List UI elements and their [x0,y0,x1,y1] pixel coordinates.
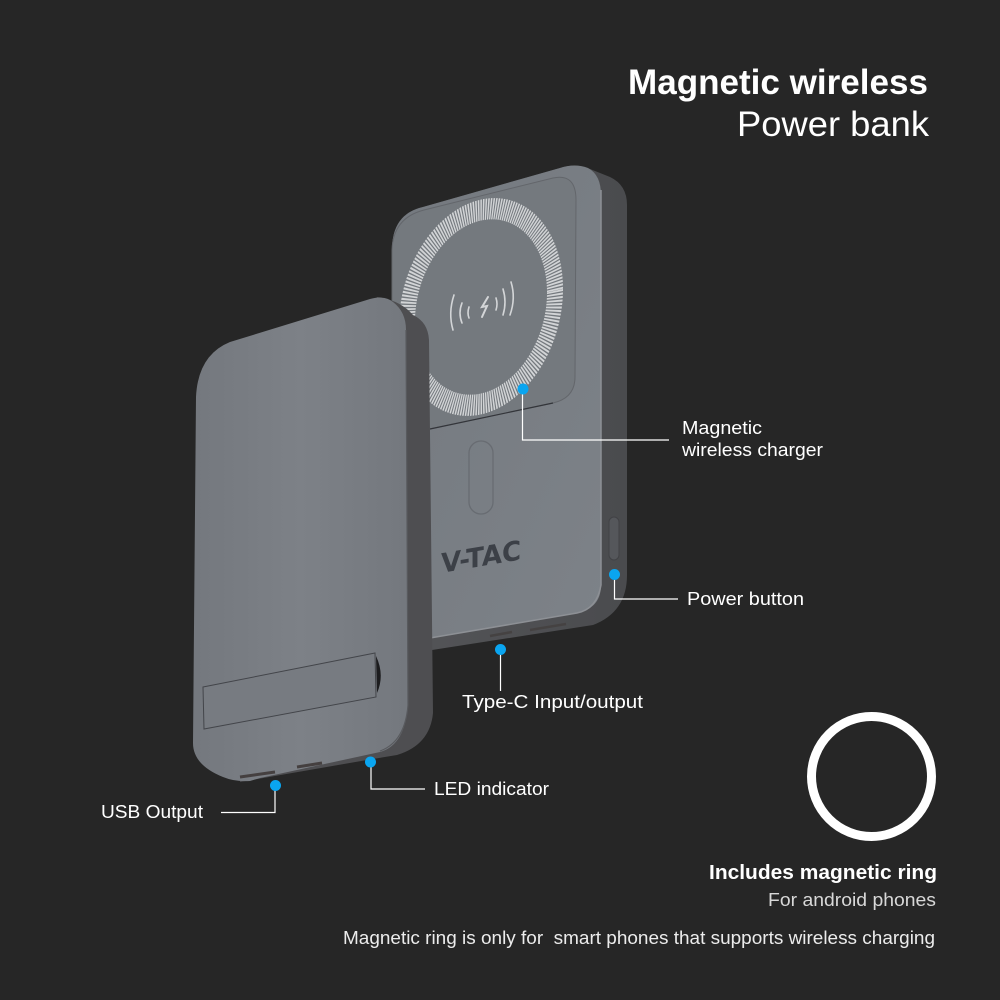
front device side [240,297,433,782]
title [628,63,930,144]
back device face [392,166,601,640]
USB port [240,763,322,777]
ring note: For android phones [768,890,936,910]
ring note: Includes magnetic ring [709,862,937,884]
ring note: Magnetic ring is only for smart phones that supports wireless charging [343,928,935,948]
kickstand [203,653,376,729]
oval button mark [469,441,493,514]
callout: magnetic wireless charger: Magnetic [682,418,762,438]
bottom edge highlight [430,190,601,638]
title: Power bank [737,105,930,144]
wireless charging pad [392,177,576,431]
callout: USB output: USB Output [101,802,203,822]
ring note [343,862,937,948]
callout: type-c [462,644,643,712]
front device face [193,298,408,781]
callout: LED indicator: LED indicator [434,779,549,799]
side power button [609,517,619,560]
title: Magnetic wireless [628,63,928,102]
front power bank [193,297,433,782]
callout: magnetic wireless charger: wireless charger [681,440,823,460]
callout: LED indicator [365,756,549,799]
face edge line [380,330,408,751]
icon: magnetic ring [812,716,932,836]
V-TAC logo: V-TAC [441,536,521,580]
pad lower edge [430,403,553,429]
back device body [392,166,627,650]
callout: power button [609,569,804,609]
kickstand notch [376,656,381,693]
wireless charge icon [451,282,513,330]
back power bank [392,166,627,650]
callout: power button: Power button [687,589,804,609]
bolt [482,297,488,317]
callout: type-c: Type-C Input/output [462,692,643,712]
callout: USB output [101,780,281,822]
ports back [490,624,566,636]
magnetic ring ticks [407,194,555,420]
callout: magnetic wireless charger [518,384,823,460]
